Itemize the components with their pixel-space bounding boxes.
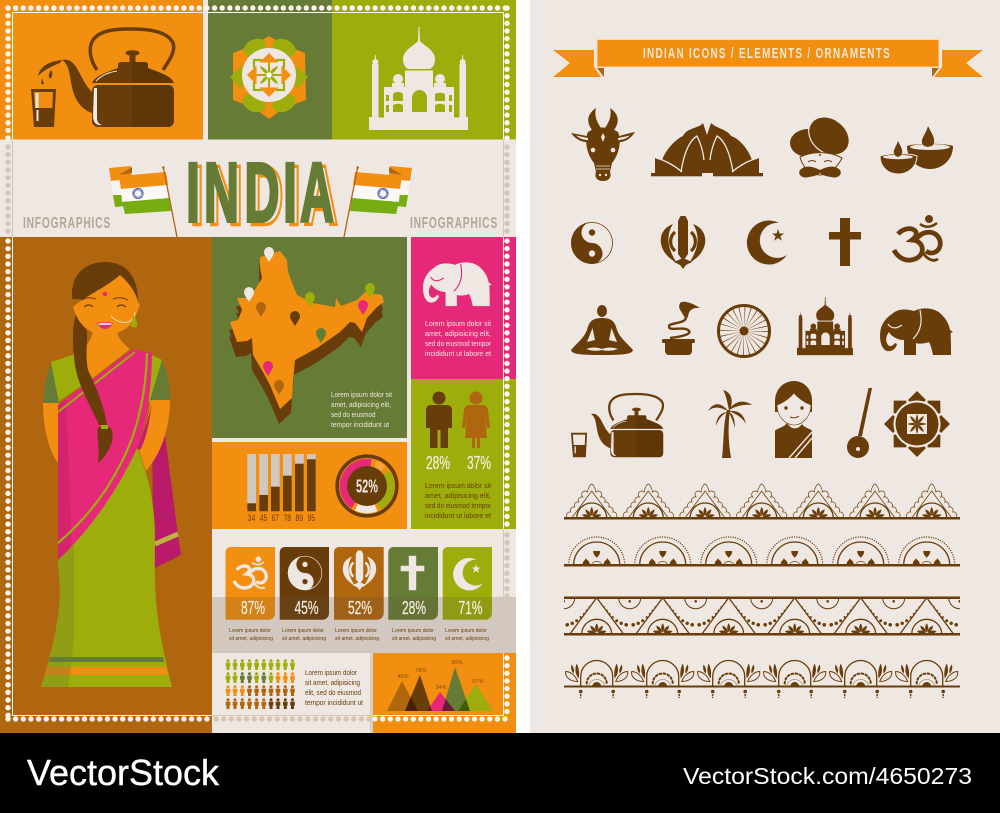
card: khanda bbox=[334, 547, 384, 620]
map text: tempor incididunt ut bbox=[331, 422, 389, 429]
panel: mountain chart bbox=[373, 653, 516, 733]
footer bar bbox=[0, 733, 1000, 813]
elephant text: Lorem ipsum dolor sit bbox=[425, 321, 491, 328]
title: N bbox=[204, 146, 239, 240]
people text: elit, sed do eiusmod bbox=[305, 688, 361, 697]
map text: sed do eiusmod bbox=[331, 412, 376, 419]
icon: mandala dark bbox=[884, 391, 950, 457]
triangles chart bbox=[387, 660, 493, 711]
card percentages: 71% bbox=[458, 598, 482, 618]
card captions bbox=[229, 628, 489, 642]
dotted border bbox=[8, 8, 507, 719]
footer url: VectorStock.com/4650273 bbox=[683, 763, 972, 789]
gender text bbox=[425, 483, 492, 520]
icon: woman figure bbox=[462, 392, 490, 448]
panel: elephant bbox=[411, 237, 516, 379]
right flag bbox=[344, 166, 412, 237]
right panel bbox=[530, 0, 1000, 733]
footer logo: VectorStock bbox=[27, 752, 220, 793]
triangles chart: 46% bbox=[397, 674, 409, 680]
title: A bbox=[300, 146, 334, 240]
ornament border 3 bbox=[564, 596, 960, 636]
card: yin yang bbox=[280, 547, 329, 620]
map pins bbox=[244, 247, 375, 395]
ribbon banner bbox=[553, 40, 983, 77]
icon: cow bbox=[571, 108, 635, 181]
map text: Lorem ipsum dolor sit bbox=[331, 392, 392, 399]
triangles chart: 34% bbox=[435, 685, 447, 691]
gender text: incididunt ut labore et bbox=[425, 513, 491, 520]
panel: woman bbox=[0, 237, 212, 733]
gender percentages: 37% bbox=[467, 453, 491, 473]
title: I bbox=[190, 148, 204, 243]
card captions: sit amet, adipisicing bbox=[282, 636, 326, 642]
title: D bbox=[244, 146, 280, 240]
card percentages bbox=[241, 598, 482, 618]
card: crescent bbox=[443, 547, 492, 620]
icon: Taj Mahal bbox=[369, 27, 468, 130]
card captions: sit amet, adipisicing bbox=[392, 636, 436, 642]
stacked bar chart: 34 bbox=[248, 513, 255, 523]
icon: om bbox=[894, 217, 940, 260]
icon: khanda bbox=[661, 216, 705, 269]
icon: dharma wheel bbox=[718, 306, 770, 356]
icon: yin yang bbox=[571, 222, 612, 264]
panel: gender stats bbox=[411, 379, 516, 529]
icon: elephant bbox=[423, 262, 492, 306]
title: I bbox=[283, 145, 297, 240]
panel: mandala bbox=[208, 0, 332, 140]
card captions: Lorem ipsum dolor bbox=[392, 628, 434, 634]
card captions: sit amet, adipisicing bbox=[335, 636, 379, 642]
panel: kettle bbox=[0, 0, 203, 140]
card: cross bbox=[388, 547, 438, 620]
donut chart: 52% bbox=[356, 476, 378, 496]
ornament border 1 bbox=[564, 484, 960, 520]
triangles chart: 95% bbox=[451, 660, 463, 666]
card captions: sit amet, adipisicing bbox=[229, 636, 273, 642]
icon: crescent bbox=[747, 221, 787, 265]
title: A bbox=[304, 149, 338, 243]
people text: Lorem ipsum dolor bbox=[305, 668, 357, 677]
icon: oil lamps bbox=[880, 126, 953, 174]
triangles chart: 67% bbox=[472, 679, 484, 685]
religion cards bbox=[226, 547, 492, 620]
elephant text: sed do eiusmod tempor bbox=[425, 341, 492, 348]
icon: mandala flower bbox=[230, 35, 308, 119]
translucent strip bbox=[212, 597, 516, 653]
stacked bar chart: 95 bbox=[308, 513, 315, 523]
gender percentages bbox=[426, 453, 491, 473]
subtitle right: INFOGRAPHICS bbox=[410, 215, 498, 232]
card percentages: 87% bbox=[241, 598, 265, 618]
panel: charts bbox=[212, 442, 407, 529]
icon: small Taj Mahal bbox=[797, 297, 853, 355]
title bbox=[186, 145, 338, 243]
ornament border 2 bbox=[564, 537, 960, 566]
card percentages: 28% bbox=[402, 598, 426, 618]
icon: cross bbox=[829, 218, 861, 266]
people text: tempor incididunt ut bbox=[305, 698, 364, 707]
icon: sitar bbox=[847, 388, 872, 458]
left flag bbox=[109, 166, 177, 237]
icon: woman bust bbox=[775, 381, 812, 458]
card captions: Lorem ipsum dolor bbox=[445, 628, 487, 634]
people text: sit amet, adipisicing bbox=[305, 678, 360, 687]
icon: man bbox=[426, 392, 452, 448]
card: om bbox=[226, 547, 275, 620]
stacked bar chart: 78 bbox=[284, 513, 291, 523]
title: I bbox=[186, 145, 200, 240]
icon: palm tree bbox=[708, 390, 752, 458]
gender text: Lorem ipsum dolor sit bbox=[425, 483, 491, 490]
icon: lotus temple bbox=[651, 123, 763, 176]
card captions: Lorem ipsum dolor bbox=[335, 628, 377, 634]
map text bbox=[331, 392, 392, 429]
elephant text: incididunt ut labore et bbox=[425, 351, 491, 358]
elephant text bbox=[425, 321, 492, 358]
donut chart bbox=[337, 456, 397, 516]
triangles chart: 78% bbox=[415, 668, 427, 674]
title: N bbox=[208, 149, 243, 243]
gender percentages: 28% bbox=[426, 453, 450, 473]
gender text: amet, adipisicing elit, bbox=[425, 493, 491, 500]
panel: map of India bbox=[212, 237, 407, 438]
elephant text: amet, adipisicing elit, bbox=[425, 331, 491, 338]
ornament border 4 bbox=[564, 660, 960, 698]
icon: kettle and glass bbox=[31, 29, 174, 127]
people text bbox=[305, 668, 364, 707]
subtitle left: INFOGRAPHICS bbox=[23, 215, 111, 232]
card percentages: 45% bbox=[294, 598, 318, 618]
card captions: sit amet, adipisicing bbox=[445, 636, 489, 642]
icon: kettle dark bbox=[571, 394, 663, 457]
left poster background bbox=[0, 0, 516, 733]
card captions: Lorem ipsum dolor bbox=[229, 628, 271, 634]
map shape bbox=[229, 251, 384, 424]
map text: amet, adipisicing elit, bbox=[331, 402, 391, 409]
stacked bar chart: 45 bbox=[260, 513, 267, 523]
title: D bbox=[248, 149, 284, 243]
icon: elephant dark bbox=[880, 308, 953, 355]
illustration: woman in sari bbox=[41, 262, 181, 687]
gender text: sed do eiusmod tempor bbox=[425, 503, 492, 510]
stacked bar chart: 89 bbox=[296, 513, 303, 523]
panel: Taj Mahal bbox=[332, 0, 516, 140]
flags bbox=[109, 166, 412, 237]
icons bbox=[571, 108, 953, 458]
people pictogram bbox=[226, 659, 295, 709]
card captions: Lorem ipsum dolor bbox=[282, 628, 324, 634]
icon: meditation bbox=[571, 305, 633, 355]
title: I bbox=[287, 148, 301, 243]
stacked bar chart bbox=[247, 454, 316, 523]
stacked bar chart: 67 bbox=[272, 513, 279, 523]
icon: cobra in pot bbox=[662, 302, 700, 355]
icon: man with turban bbox=[790, 109, 857, 178]
card percentages: 52% bbox=[348, 598, 372, 618]
